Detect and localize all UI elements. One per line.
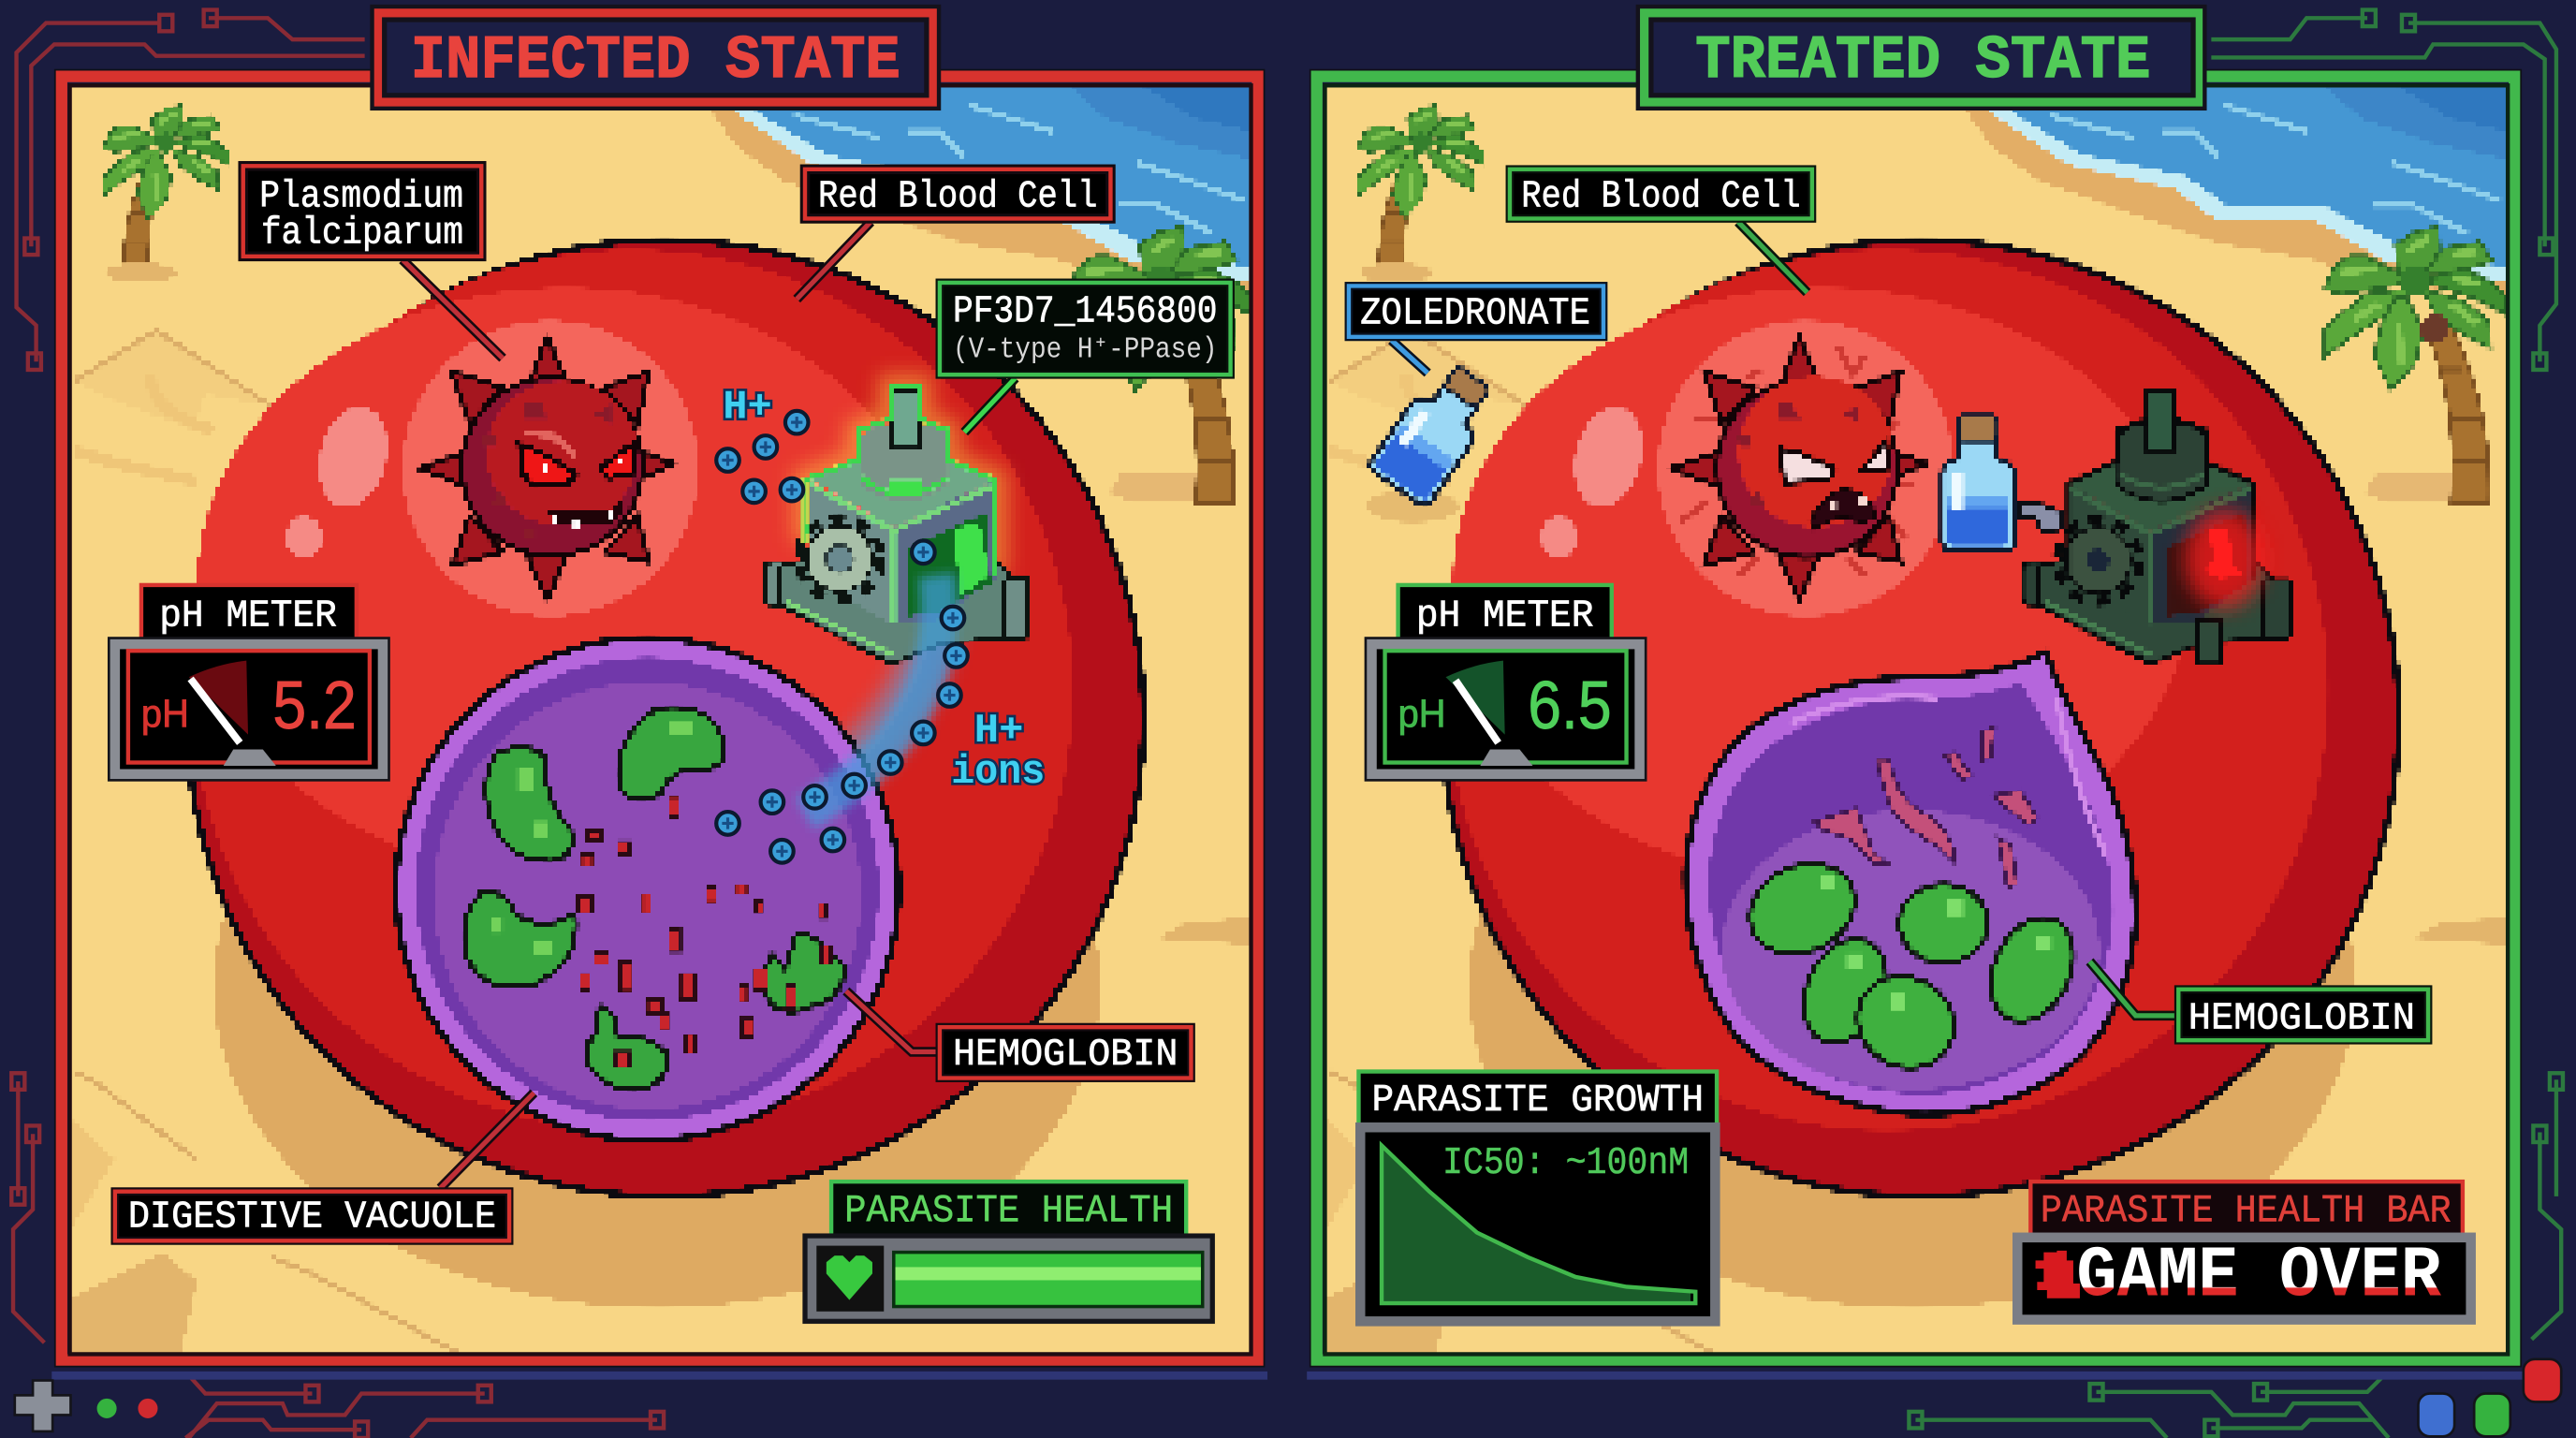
gear — [798, 518, 881, 600]
stream over pump and vacuole — [805, 575, 939, 814]
panel frame: infected — [54, 74, 1265, 1377]
parasite, damaged — [1671, 337, 1927, 600]
title: treated state: TREATED STATE — [1695, 26, 2150, 95]
parasite health bar: game over: PARASITE HEALTH BAR — [2041, 1189, 2452, 1234]
title: treated state — [1638, 7, 2204, 109]
pink fragments — [1815, 728, 2037, 888]
parasite, angry — [419, 337, 675, 600]
H+ ions label: H+ — [974, 708, 1023, 755]
label: Plasmodium falciparum: Plasmodium — [259, 176, 463, 219]
indicator: red light — [138, 1399, 157, 1418]
label: hemoglobin (infected) — [846, 991, 1191, 1078]
vacuole, shrivelled — [1686, 653, 2136, 1114]
parasite health bar: infected — [805, 1181, 1212, 1321]
label: hemoglobin (treated) — [2089, 961, 2428, 1040]
pH meter: infected: pH METER — [159, 594, 337, 638]
label: zoledronate: ZOLEDRONATE — [1360, 292, 1590, 335]
hemoglobin blobs — [463, 707, 846, 1091]
panel: treated scene — [1325, 85, 2507, 1354]
red blood cell — [187, 240, 1144, 1196]
pH meter: infected: 5.2 — [272, 668, 357, 743]
chart: parasite growth — [1358, 1072, 1717, 1321]
indicator: green light — [97, 1399, 117, 1418]
icon: d-pad — [15, 1381, 70, 1431]
H+ ions label — [951, 708, 1045, 796]
label: Plasmodium falciparum — [243, 166, 503, 359]
panel: infected scene — [69, 85, 1251, 1354]
label: PF3D7_1456800 pump — [940, 283, 1231, 433]
button: red — [2524, 1359, 2561, 1401]
V-type pump, active — [764, 387, 1029, 664]
parasite health bar: infected: PARASITE HEALTH — [844, 1189, 1173, 1234]
H+ ions — [716, 411, 968, 863]
label: hemoglobin (infected): HEMOGLOBIN — [953, 1034, 1178, 1077]
label: red blood cell (treated): Red Blood Cell — [1521, 176, 1801, 219]
H+ ions label: ions — [951, 749, 1045, 796]
label: PF3D7_1456800 pump: (V-type H⁺-PPase) — [953, 333, 1218, 366]
circuit traces: treated side — [1909, 10, 2563, 1438]
chart: parasite growth: IC50: ~100nM — [1442, 1142, 1689, 1185]
growth curve — [1382, 1146, 1690, 1303]
parasite health bar: game over: GAME OVER — [2076, 1236, 2442, 1317]
beach backdrop — [69, 85, 1251, 1354]
red blood cell — [1442, 240, 2398, 1196]
pH meter: treated: pH METER — [1416, 594, 1593, 638]
title: infected state — [373, 7, 939, 109]
pH meter: infected: pH — [141, 691, 189, 735]
label: hemoglobin (treated): HEMOGLOBIN — [2188, 997, 2415, 1040]
label: zoledronate — [1349, 286, 1603, 373]
V-type pump, inactive — [2023, 389, 2291, 664]
chart: parasite growth: PARASITE GROWTH — [1372, 1079, 1704, 1123]
stream of H+ ions — [842, 642, 969, 790]
inhibitor connector — [2019, 503, 2063, 533]
label: digestive vacuole — [115, 1093, 534, 1240]
H+ label: H+ — [723, 384, 772, 431]
panel frame: treated — [1310, 74, 2520, 1377]
label: PF3D7_1456800 pump: PF3D7_1456800 — [953, 291, 1218, 334]
circuit traces: infected side — [11, 10, 664, 1438]
button: blue — [2419, 1394, 2454, 1436]
depleted bar glitch — [2036, 1251, 2080, 1299]
pH meter: infected — [110, 585, 388, 779]
heart icon — [827, 1255, 872, 1300]
beach backdrop — [1325, 85, 2507, 1354]
label: red blood cell (infected): Red Blood Cell — [818, 176, 1097, 219]
label: Plasmodium falciparum: falciparum — [261, 212, 463, 255]
gear, stopped — [2056, 520, 2139, 601]
label: red blood cell (treated) — [1510, 169, 1812, 292]
title: infected state: INFECTED STATE — [411, 26, 900, 95]
vacuole, healthy — [396, 638, 899, 1140]
pH meter: treated: 6.5 — [1528, 668, 1612, 743]
pH meter: treated: pH — [1398, 691, 1445, 735]
zoledronate vial, free — [1367, 365, 1488, 524]
red warning light — [2185, 509, 2264, 608]
pH meter: treated — [1367, 585, 1645, 779]
parasite health bar: game over — [2017, 1181, 2471, 1320]
zoledronate vial, attacking pump — [1942, 416, 2014, 550]
label: digestive vacuole: DIGESTIVE VACUOLE — [128, 1196, 496, 1240]
button: green — [2474, 1394, 2510, 1436]
label: red blood cell (infected) — [797, 169, 1110, 299]
intact hemoglobin beans — [1735, 847, 2089, 1085]
